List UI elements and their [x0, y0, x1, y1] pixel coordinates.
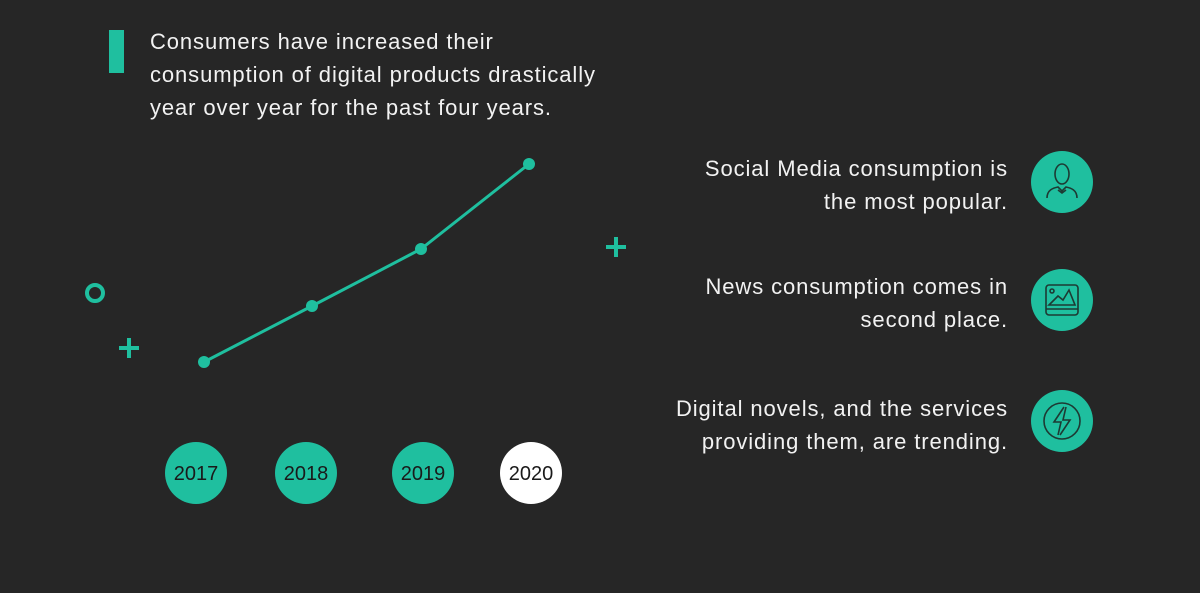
year labels: 2018: [284, 463, 328, 485]
text: social media: the most popular.: [824, 189, 1008, 214]
text: novels: providing them, are trending.: [702, 429, 1008, 454]
text: novels: Digital novels, and the services: [676, 396, 1008, 421]
accent bar: [109, 30, 124, 73]
icon: bolt: [1031, 390, 1093, 452]
year labels: 2020: [509, 463, 553, 485]
icon: image: [1031, 269, 1093, 331]
year labels: 2019: [401, 463, 445, 485]
trend line: [198, 158, 535, 368]
decorative shapes: [87, 285, 103, 301]
text: news: [705, 274, 1008, 332]
year labels: 2017: [174, 463, 218, 485]
text: news: News consumption comes in: [705, 274, 1008, 299]
year labels: [165, 442, 562, 504]
title: year over year for the past four years.: [150, 95, 552, 120]
text: social media: Social Media consumption is: [705, 156, 1008, 181]
title: Consumers have increased their: [150, 29, 494, 54]
icon: person: [1031, 151, 1093, 213]
title: consumption of digital products drastically: [150, 62, 596, 87]
text: social media: [705, 156, 1008, 214]
title: [150, 29, 596, 120]
text: novels: [676, 396, 1008, 454]
text: news: second place.: [861, 307, 1008, 332]
